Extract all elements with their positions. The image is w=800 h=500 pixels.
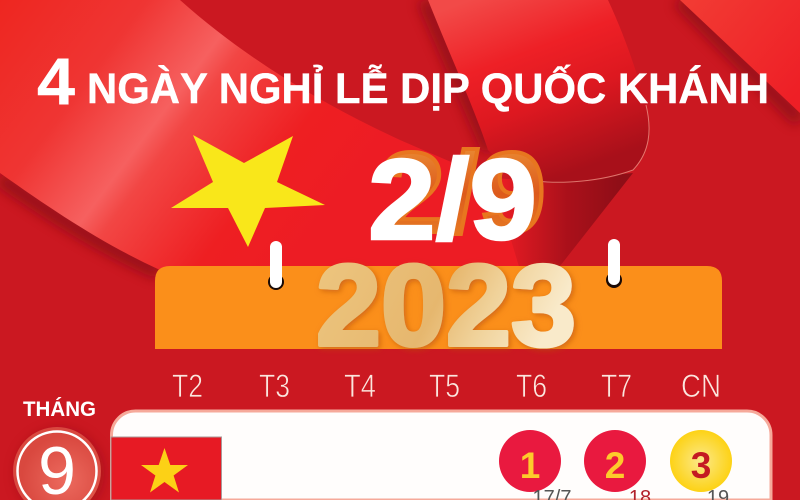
- date 2/9: 2/9: [368, 137, 537, 264]
- weekday labels: T3: [259, 368, 290, 404]
- weekday labels: T6: [516, 368, 547, 404]
- weekday labels: T4: [344, 368, 376, 404]
- ribbon shadows: [0, 0, 800, 272]
- weekday labels: [172, 368, 721, 404]
- calendar ring right: [606, 239, 622, 288]
- weekday labels: CN: [681, 368, 721, 404]
- weekday labels: T2: [172, 368, 203, 404]
- title: [37, 44, 769, 118]
- month badge: [13, 427, 104, 500]
- date 2/9: 2/9: [378, 130, 546, 257]
- ribbon: left red fold: [0, 0, 633, 270]
- flag: [111, 437, 222, 500]
- title: 4: [37, 44, 75, 118]
- day 2 marker: 2: [605, 445, 625, 486]
- lunar dates: [534, 489, 728, 500]
- month label: THÁNG: [23, 398, 96, 421]
- title: NGÀY NGHỈ LỄ DỊP QUỐC KHÁNH: [87, 64, 769, 113]
- day 1 marker: 1: [520, 445, 540, 486]
- ribbon: middle curl: [428, 0, 649, 183]
- calendar panel: [112, 411, 771, 500]
- ribbon: fold shadow: [490, 173, 633, 270]
- day 3 marker: [670, 430, 732, 492]
- calendar header bar: [155, 266, 722, 349]
- ribbon: curl highlight: [537, 105, 649, 182]
- calendar ring left: [268, 241, 284, 290]
- weekday labels: T5: [429, 368, 460, 404]
- weekday labels: T7: [601, 368, 632, 404]
- ribbon: right red fold: [680, 0, 800, 113]
- day 2 marker: [584, 430, 646, 492]
- day 1 marker: [499, 430, 561, 492]
- day 3 marker: 3: [691, 445, 711, 486]
- year 2023: 2023: [316, 242, 576, 370]
- icon: yellow star: [171, 135, 325, 247]
